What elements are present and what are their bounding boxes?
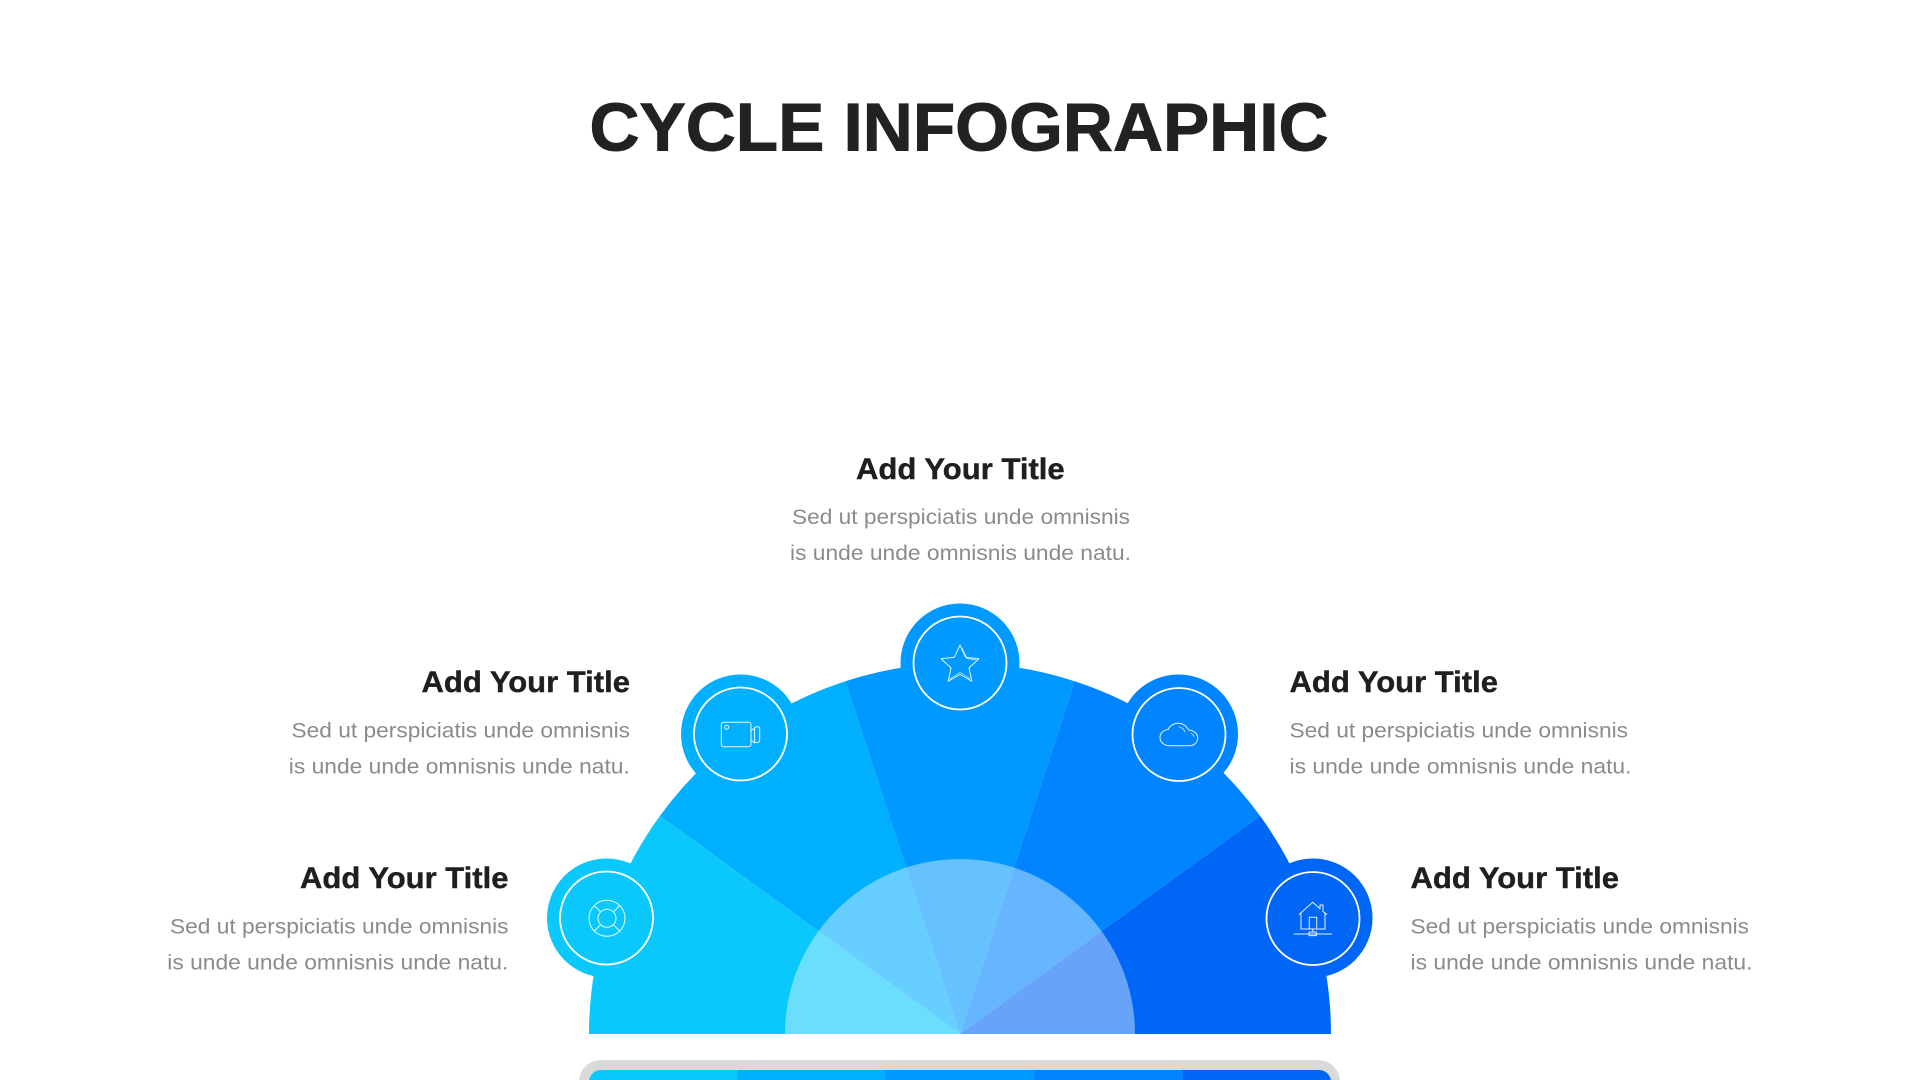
text block: upper left <box>289 666 630 778</box>
sector 5: deep blue <box>960 816 1372 1034</box>
body line: top 2: is unde unde omnisnis unde natu. <box>790 542 1131 565</box>
bar segments <box>589 1070 1331 1080</box>
bar frame <box>579 1060 1340 1080</box>
inner translucent semicircle <box>785 859 1135 1034</box>
heading: upper left: Add Your Title <box>422 666 630 699</box>
body line: top 1: Sed ut perspiciatis unde omnisnis <box>792 506 1130 529</box>
segmented progress bar <box>579 1060 1340 1080</box>
body line: upper left 1: Sed ut perspiciatis unde omnisnis <box>292 720 630 742</box>
sector 1: cyan <box>547 816 960 1034</box>
text block: upper right <box>1290 666 1632 778</box>
text block: lower right <box>1410 862 1752 974</box>
body line: upper left 2: is unde unde omnisnis unde natu. <box>289 756 630 778</box>
body line: lower left 1: Sed ut perspiciatis unde omnisnis <box>170 916 508 938</box>
semicircle cycle chart <box>547 604 1372 1034</box>
text block: lower left <box>167 862 509 974</box>
icon: star <box>914 616 1006 710</box>
icon: cloud <box>1132 688 1226 781</box>
body line: upper right 1: Sed ut perspiciatis unde omnisnis <box>1290 720 1628 742</box>
heading: top: Add Your Title <box>856 453 1065 486</box>
body line: lower right 1: Sed ut perspiciatis unde omnisnis <box>1410 916 1749 938</box>
text block: top <box>790 453 1131 565</box>
body line: lower right 2: is unde unde omnisnis unde natu. <box>1410 952 1752 974</box>
heading: lower left: Add Your Title <box>300 862 508 895</box>
body line: upper right 2: is unde unde omnisnis unde natu. <box>1290 756 1632 778</box>
title: CYCLE INFOGRAPHIC <box>590 90 1328 166</box>
infographic canvas <box>168 102 1750 1080</box>
body line: lower left 2: is unde unde omnisnis unde natu. <box>167 952 508 974</box>
sector 4: blue <box>960 674 1260 1034</box>
icon: lifebuoy <box>560 872 653 964</box>
sector 2: sky blue <box>660 674 960 1034</box>
heading: lower right: Add Your Title <box>1410 862 1619 895</box>
icon: camera <box>694 688 787 780</box>
icon: home network <box>1266 872 1360 965</box>
heading: upper right: Add Your Title <box>1290 666 1498 699</box>
sector 3: azure <box>845 604 1075 1034</box>
